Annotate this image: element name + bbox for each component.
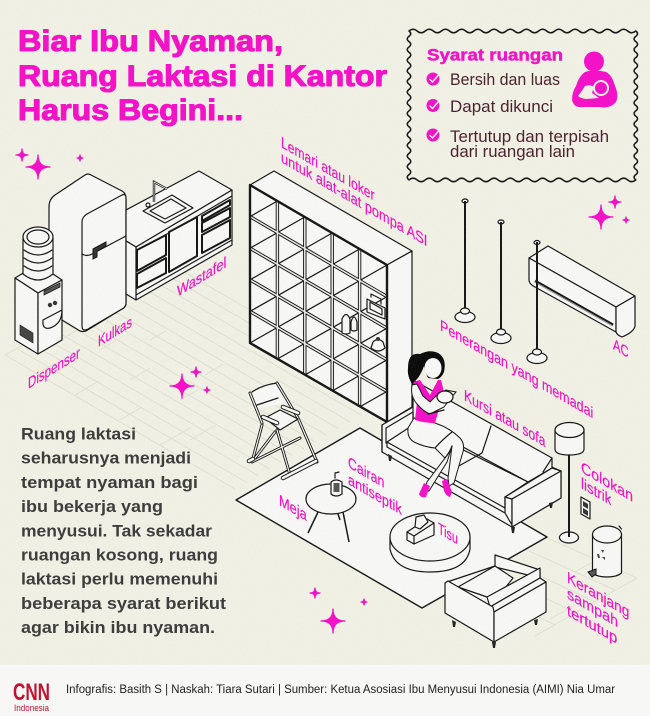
locker shelf [250, 171, 412, 422]
breast pump bag [367, 294, 385, 319]
antiseptic bottle [331, 472, 342, 496]
body text: seharusnya menjadi [21, 449, 191, 468]
body text: laktasi perlu memenuhi [21, 570, 218, 589]
title: Ruang Laktasi di Kantor [18, 60, 387, 93]
sparkles bottom [310, 588, 367, 633]
milk bottles [342, 314, 357, 334]
body text: menyusui. Tak sekadar [21, 521, 212, 540]
sofa [382, 380, 561, 533]
sofa legs [388, 454, 553, 533]
title: Harus Begini... [18, 94, 243, 127]
baby and arms [412, 384, 456, 414]
label: cairan antiseptik [348, 454, 402, 519]
label: keranjang [567, 569, 629, 648]
floor lamp [555, 422, 584, 543]
body text: Ruang laktasi [21, 424, 136, 444]
checklist: Dapat dikunci [450, 97, 553, 116]
label: keranjang: Keranjang [567, 569, 629, 622]
panel heading: Syarat ruangan [427, 46, 563, 64]
label: colokan: listrik [581, 475, 612, 510]
sparkles middle left [170, 367, 210, 398]
mother holding baby [408, 351, 464, 497]
credits: Infografis: Basith S | Naskah: Tiara Sutari | Sumber: Ketua Asosiasi Ibu Menyusui Indonesia (AIMI) Nia Umar [66, 684, 615, 696]
rug [236, 428, 547, 608]
body text: ibu bekerja yang [21, 497, 163, 516]
title [18, 25, 387, 127]
panel: syarat ruangan [407, 29, 638, 182]
label: keranjang: tertutup [567, 602, 617, 648]
label: lemari: untuk alat-alat pompa ASI [281, 149, 427, 251]
icon: breastfeeding mother [572, 52, 617, 107]
high chair [249, 383, 317, 478]
CNN Indonesia logo [13, 679, 50, 714]
label: dispenser: Dispenser [28, 344, 80, 393]
body text: ruangan kosong, ruang [21, 546, 218, 564]
checklist [426, 70, 609, 161]
round table [390, 513, 470, 572]
label: kursi: Kursi atau sofa [464, 387, 546, 451]
hair and face [408, 351, 445, 384]
checklist: Bersih dan luas [450, 70, 560, 89]
body text: beberapa syarat berikut [21, 594, 226, 613]
CNN Indonesia logo: CNN [13, 679, 50, 706]
checklist: dari ruangan lain [450, 142, 575, 161]
footer [0, 665, 650, 716]
label: colokan: Colokan [581, 459, 633, 506]
armchair [445, 555, 546, 648]
tissue box [407, 515, 434, 544]
sparkles top right [589, 196, 629, 229]
breast pump [371, 337, 385, 351]
ceiling light front [527, 240, 547, 364]
sink basin and faucet [143, 182, 193, 223]
water bottle [23, 227, 53, 280]
shoes [419, 479, 452, 497]
side table [306, 472, 356, 542]
floor planks [5, 261, 637, 636]
label: cairan antiseptik: antiseptik [348, 471, 402, 519]
label: penerangan: Penerangan yang memadai [440, 317, 593, 423]
label: AC: AC [613, 336, 629, 362]
air conditioner [529, 246, 635, 337]
sparkles top left [16, 149, 83, 179]
label: lemari: Lemari atau loker [281, 134, 375, 205]
body text [21, 424, 226, 637]
label: keranjang: sampah [567, 585, 618, 632]
label: kulkas: Kulkas [98, 313, 132, 351]
trash bin [588, 526, 622, 577]
water dispenser [15, 227, 62, 354]
sink cabinet [126, 171, 232, 300]
refrigerator [49, 174, 126, 332]
body text: tempat nyaman bagi [21, 473, 198, 492]
body text: agar bikin ibu nyaman. [21, 618, 215, 637]
power outlet [581, 497, 590, 519]
label: tisu: Tisu [438, 520, 458, 549]
label: wastafel: Wastafel [177, 254, 226, 301]
label: cairan antiseptik: Cairan [348, 454, 384, 492]
CNN Indonesia logo: Indonesia [14, 703, 50, 714]
label: meja: Meja [279, 492, 307, 525]
checklist: Tertutup dan terpisah [450, 127, 609, 146]
title: Biar Ibu Nyaman, [18, 25, 283, 58]
ceiling lights [455, 199, 511, 344]
